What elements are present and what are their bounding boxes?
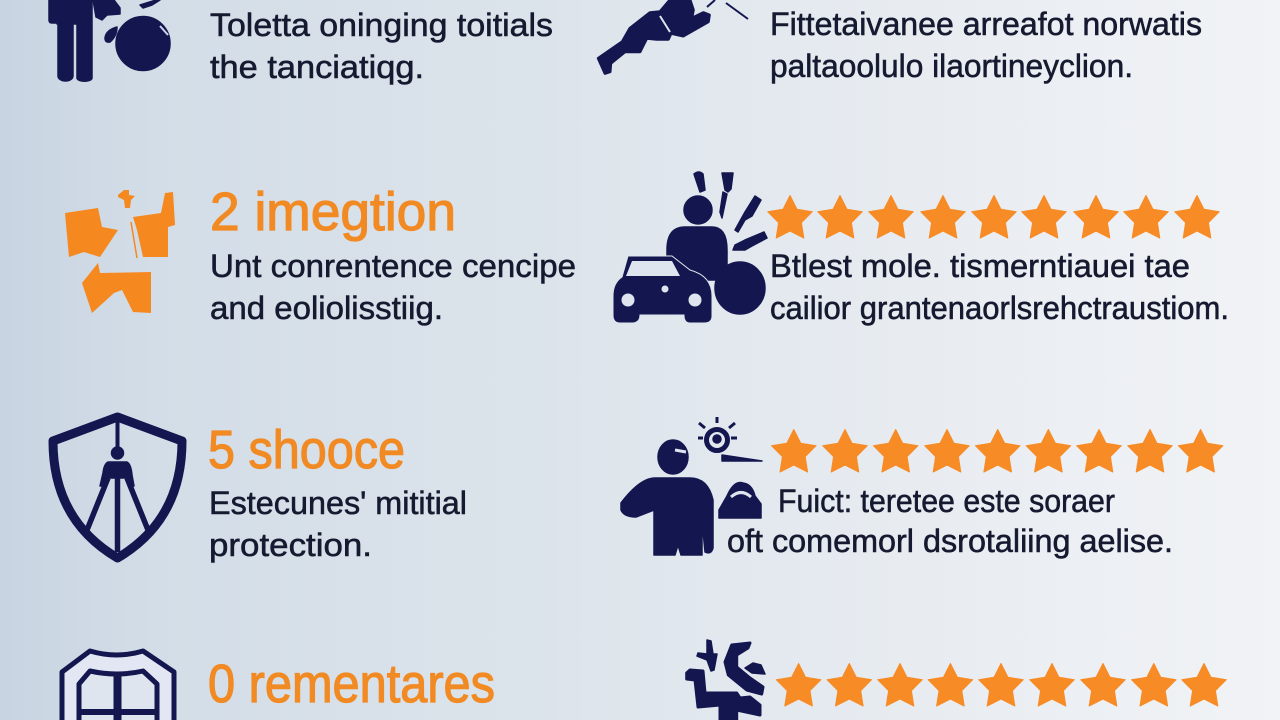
icon: diving figure bbox=[598, 0, 748, 73]
panel: item 2 bbox=[65, 182, 576, 326]
panel: bottom right item bbox=[687, 640, 1226, 720]
text: item 2 description: and eoliolisstiig. bbox=[210, 290, 443, 326]
icon: person and car collision bbox=[613, 172, 767, 323]
text: car item description: Btlest mole. tismerntiauei tae bbox=[770, 248, 1190, 284]
heading: 5 shooce: 5 shooce bbox=[208, 420, 405, 480]
icon: window shield bbox=[62, 651, 174, 720]
panel: person with bag item bbox=[621, 417, 1223, 559]
panel: car item bbox=[613, 172, 1229, 326]
text: item 5 description: Estecunes' mititial bbox=[209, 485, 467, 521]
text: top right description: paltaoolulo ilaortineyclion. bbox=[770, 48, 1133, 84]
panel: item 5 bbox=[53, 415, 467, 563]
rating: nine stars row 3 bbox=[776, 664, 1226, 706]
text: item 2 description bbox=[210, 248, 576, 326]
text: item 5 description bbox=[209, 485, 467, 563]
heading: 2 imegtion: 2 imegtion bbox=[210, 182, 456, 242]
text: car item description bbox=[770, 248, 1229, 326]
text: top left description: Toletta oninging toitials bbox=[210, 7, 553, 43]
text: top left description bbox=[210, 7, 553, 85]
text: top right description: Fittetaivanee arreafot norwatis bbox=[770, 6, 1202, 42]
text: person item description bbox=[727, 483, 1173, 559]
text: person item description: oft comemorl dsrotaliing aelise. bbox=[727, 523, 1173, 559]
text: car item description: cailior grantenaorlsrehctraustiom. bbox=[770, 290, 1229, 326]
panel: top left item bbox=[49, 0, 553, 85]
icon: falling figure bbox=[687, 640, 765, 720]
icon: shield with figure bbox=[53, 415, 182, 558]
icon: person, sun and bag bbox=[621, 417, 762, 555]
text: person item description: Fuict: teretee este soraer bbox=[778, 483, 1115, 519]
text: item 5 description: protection. bbox=[209, 527, 372, 563]
rating: nine stars row 2 bbox=[772, 430, 1223, 472]
text: item 2 description: Unt conrentence cencipe bbox=[210, 248, 576, 284]
panel: bottom left item bbox=[62, 651, 495, 720]
text: top left description: the tanciatiqg. bbox=[210, 49, 424, 85]
text: top right description bbox=[770, 6, 1202, 84]
panel: top right item bbox=[598, 0, 1202, 84]
heading: 0 rementares: 0 rementares bbox=[208, 654, 495, 714]
rating: nine stars row 1 bbox=[768, 196, 1219, 238]
icon: person with ball bbox=[49, 0, 170, 81]
icon: orange broken pieces bbox=[65, 190, 175, 313]
